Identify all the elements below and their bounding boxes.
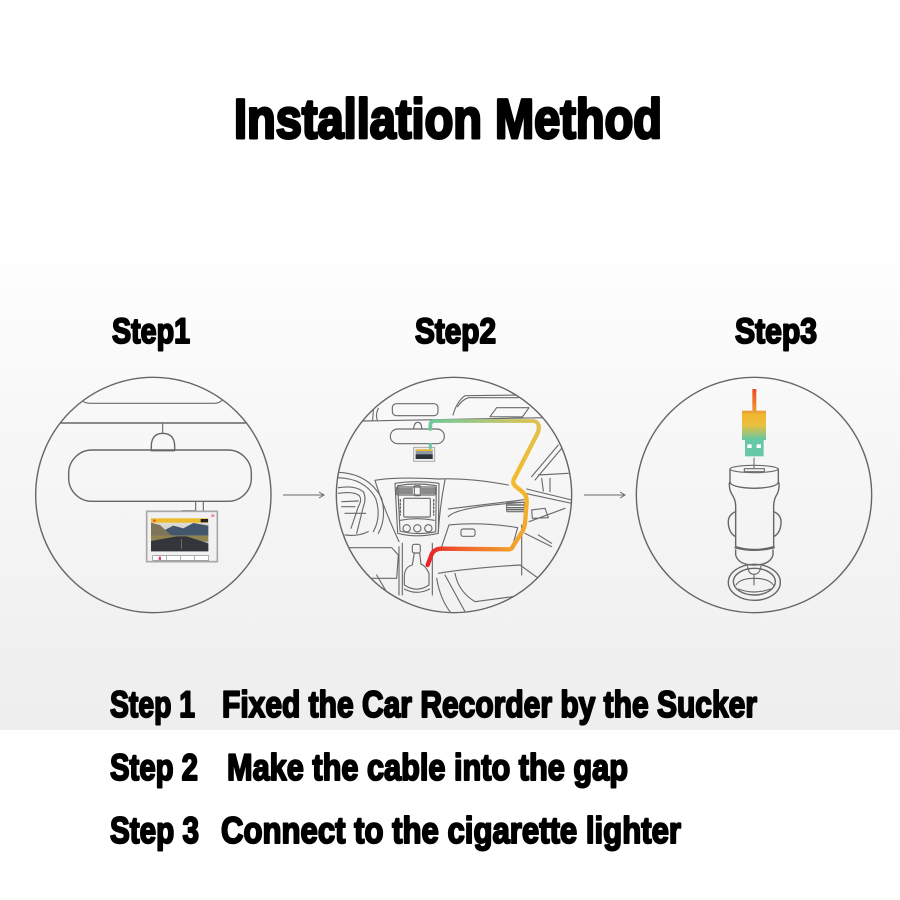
text block: instructions bbox=[110, 684, 757, 851]
icon: rear view mirror bbox=[390, 429, 444, 444]
icon: usb plug bbox=[742, 389, 766, 469]
icon: car recorder bbox=[147, 511, 217, 562]
arrow: step 1 to step 2 bbox=[283, 492, 324, 498]
instruction: step 1 bbox=[110, 684, 757, 725]
instruction: step 2 bbox=[110, 747, 628, 788]
background gradient band bbox=[0, 230, 900, 730]
panel: step 2 car interior bbox=[336, 377, 572, 613]
instruction: step 3 bbox=[110, 810, 681, 851]
arrow: step 2 to step 3 bbox=[584, 492, 625, 498]
instruction: step 2: Make the cable into the gap bbox=[227, 747, 628, 788]
gear shifter bbox=[399, 543, 432, 595]
glovebox and door bbox=[338, 445, 572, 612]
title: Installation Method bbox=[234, 87, 662, 150]
cable route bbox=[428, 421, 539, 565]
icon: recorder bbox=[414, 447, 435, 461]
centre console bbox=[395, 482, 439, 536]
steering wheel bbox=[338, 472, 384, 535]
dashboard top bbox=[375, 478, 524, 542]
sun visors and windscreen bbox=[362, 395, 545, 428]
panel: step 3 usb and charger bbox=[636, 377, 872, 613]
instruction: step 3: Connect to the cigarette lighter bbox=[221, 810, 681, 851]
heading: step1: Step1 bbox=[112, 312, 190, 351]
instruction: step 1: Step 1 bbox=[110, 684, 195, 725]
icon: mirror mount bbox=[151, 433, 175, 451]
icon: rear view mirror bbox=[69, 450, 251, 501]
instruction: step 3: Step 3 bbox=[110, 810, 199, 851]
heading: step3: Step3 bbox=[735, 312, 817, 351]
icon: car charger bbox=[728, 465, 781, 600]
instruction: step 1: Fixed the Car Recorder by the Sucker bbox=[222, 684, 757, 725]
heading: step2: Step2 bbox=[415, 312, 496, 351]
panel: step 1 mirror and recorder bbox=[36, 377, 271, 613]
instruction: step 2: Step 2 bbox=[110, 747, 198, 788]
